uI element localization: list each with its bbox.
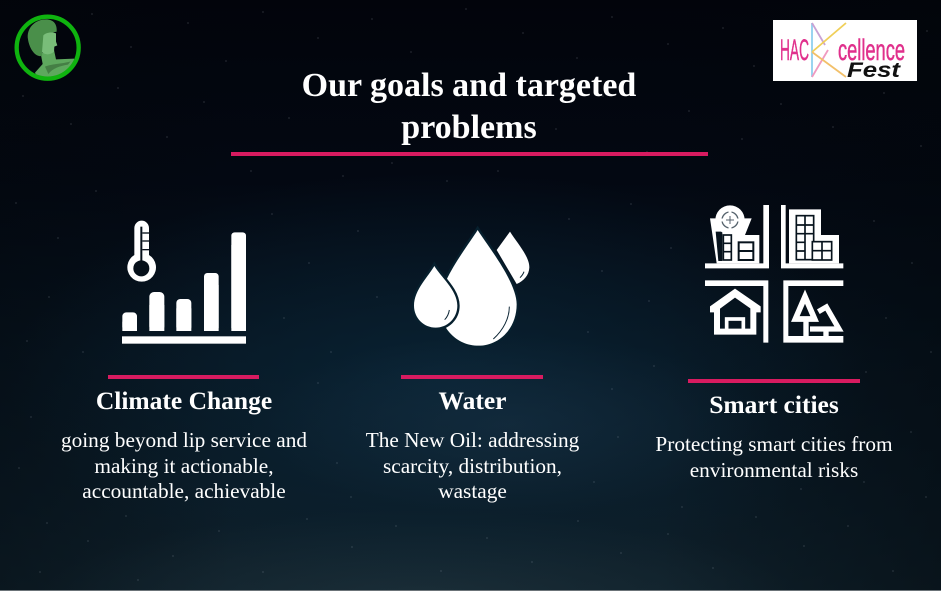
smart cities text: environmental risks (690, 458, 858, 482)
icon: water drops (414, 226, 530, 346)
logo wordmark: HAC (780, 34, 809, 67)
smart cities text: Protecting smart cities from (655, 432, 893, 456)
tower building (781, 205, 843, 268)
water heading: Water (438, 386, 506, 415)
smart cities divider (688, 379, 860, 383)
trees (783, 280, 843, 343)
avatar: green ring with statue bust (14, 14, 81, 81)
title: Our goals and targeted (302, 67, 636, 104)
logo wordmark (780, 34, 905, 67)
smart cities text (655, 432, 893, 482)
climate text (61, 428, 307, 503)
icon: thermometer and rising bars (122, 220, 246, 344)
panel: water (366, 375, 579, 503)
building with clock (705, 205, 769, 268)
panel: climate change (61, 375, 307, 503)
water text: scarcity, distribution, (383, 454, 562, 478)
water divider (401, 375, 543, 379)
water text (366, 428, 579, 503)
climate text: going beyond lip service and (61, 428, 307, 452)
climate divider (108, 375, 259, 379)
title: problems (401, 109, 537, 146)
logo star (812, 23, 846, 77)
climate heading: Climate Change (96, 386, 272, 415)
climate text: making it actionable, (94, 454, 274, 478)
water text: The New Oil: addressing (366, 428, 579, 452)
climate text: accountable, achievable (82, 479, 286, 503)
water text: wastage (438, 479, 507, 503)
title (302, 67, 636, 146)
title underline (231, 152, 708, 156)
panel: smart cities (655, 379, 893, 482)
logo: HACXcellence Fest (773, 20, 917, 81)
house (705, 280, 768, 343)
smart cities heading: Smart cities (709, 390, 839, 419)
icon: smart city quadrants (705, 205, 844, 343)
